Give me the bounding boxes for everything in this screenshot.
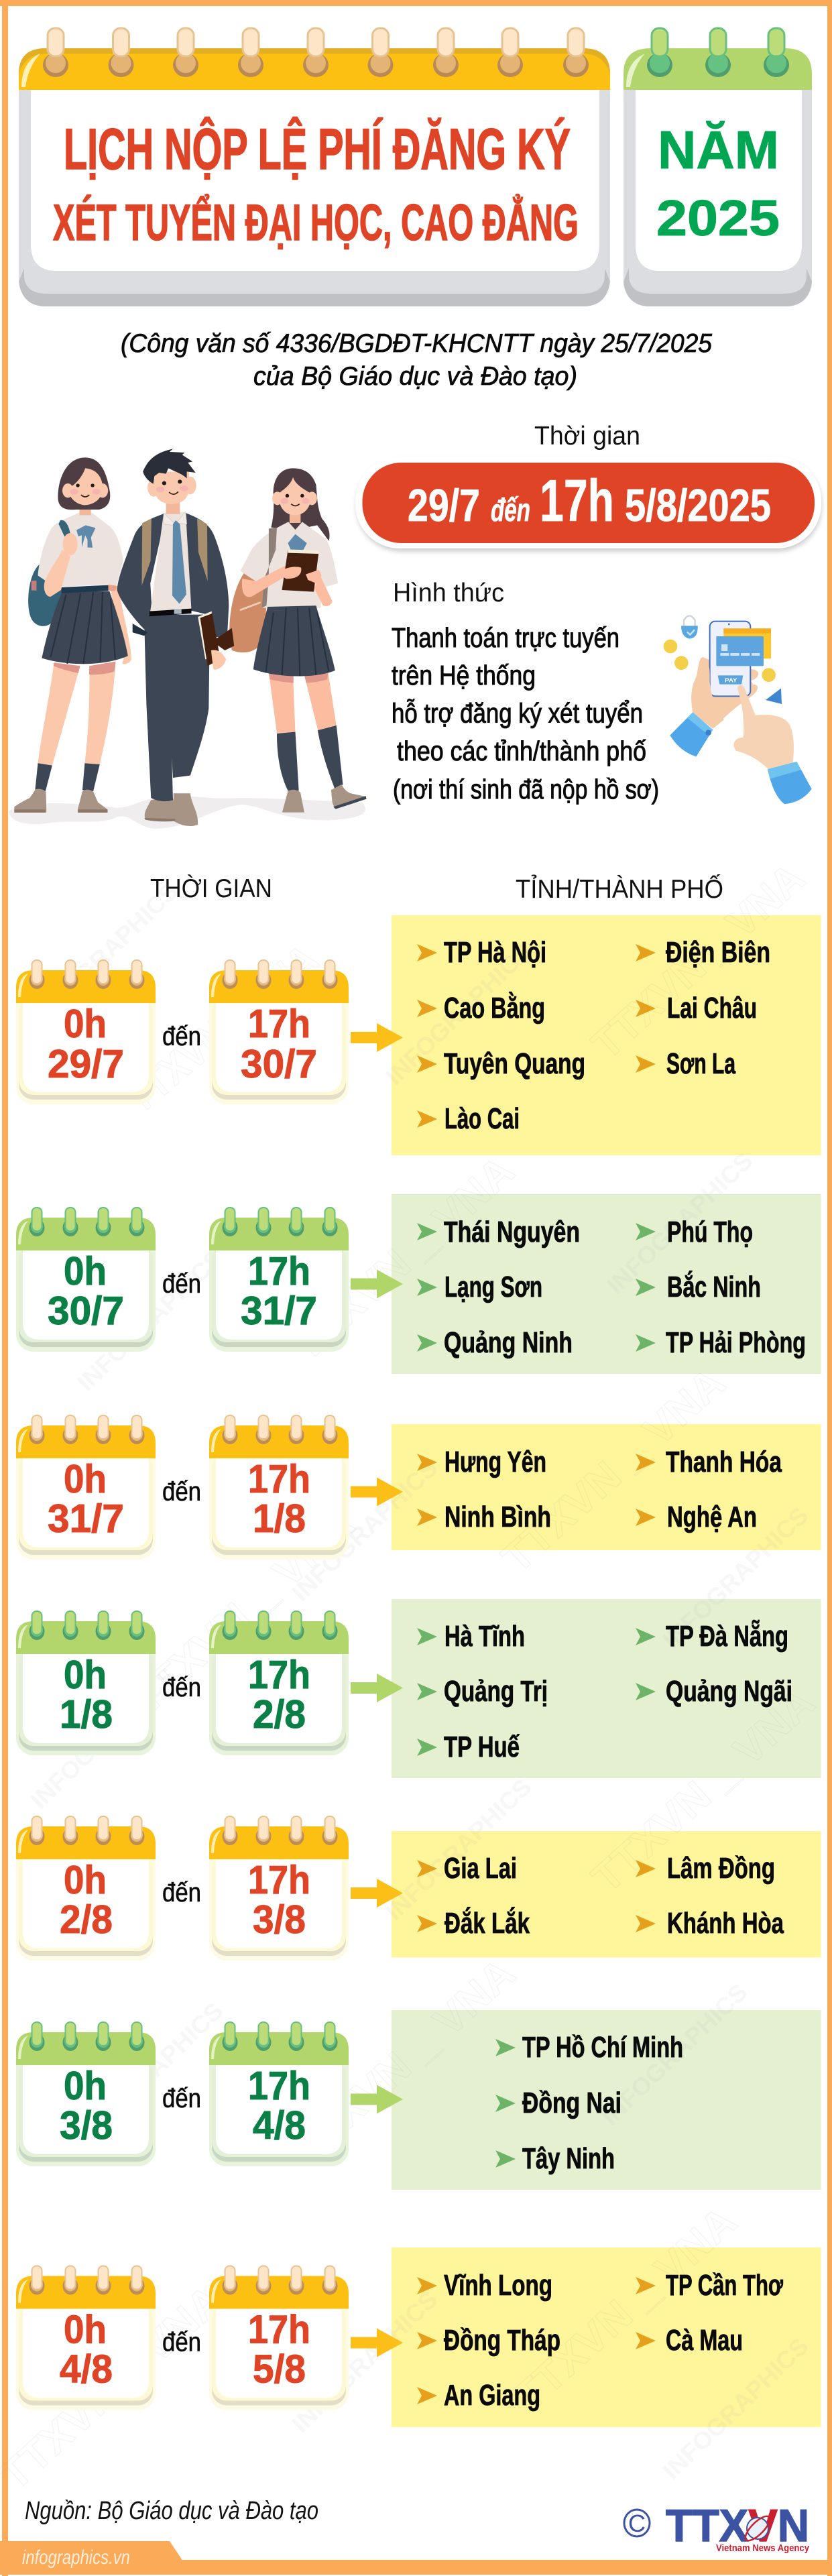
panel: provinces group 2 [392,1194,821,1374]
row 4: provinces: Quảng Trị [444,1675,548,1708]
row 2: end date calendar: 31/7 [241,1289,317,1333]
row 5: end date calendar: 3/8 [253,1897,306,1942]
row 3: provinces: Ninh Bình [444,1501,551,1533]
row 4: end date calendar [209,1611,349,1755]
payment method text: theo các tỉnh/thành phố [397,736,646,766]
row 1: provinces: TP Hà Nội [444,936,546,969]
subtitle: legal reference: của Bộ Giáo dục và Đào tạo) [253,362,577,391]
row 6: arrow [351,2085,403,2113]
row 6: start date calendar: 3/8 [60,2103,113,2148]
panel: provinces group 7 [392,2247,821,2427]
row 6: start date calendar: 0h [64,2064,107,2108]
watermark pattern: INFOGRAPHICS [601,1147,758,1299]
row 7: provinces: TP Cần Thơ [666,2269,784,2302]
title calendar [19,28,610,306]
row 7: provinces: Đồng Tháp [444,2324,560,2357]
watermark pattern: TTXVN _ VNA [283,1147,523,1370]
date range text [408,467,771,534]
icon: year calendar rings [647,28,789,77]
row 2: start date calendar: 0h [64,1249,107,1293]
watermark pattern: INFOGRAPHICS [286,2285,443,2438]
year text: NĂM [658,120,779,180]
watermark pattern: INFOGRAPHICS [72,1997,229,2150]
row 3: provinces: Nghệ An [667,1501,757,1533]
date range pill [355,457,821,551]
row 5: start date calendar [16,1816,156,1960]
year text: 2025 [656,190,780,246]
row 4: arrow [351,1674,403,1702]
watermark pattern: INFOGRAPHICS [596,1978,753,2131]
row 4: start date calendar [16,1611,156,1755]
student: boy [117,449,234,826]
watermark pattern: INFOGRAPHICS [380,1773,537,1926]
row 5: arrow [351,1879,403,1908]
row 4: end date calendar: 17h [248,1653,310,1697]
logo: TTXVN: Vietnam News Agency [716,2542,810,2554]
row 1: provinces: Cao Bằng [444,991,545,1024]
row 7: provinces: Cà Mau [666,2324,743,2357]
payment method text: trên Hệ thống [392,660,536,691]
row 7: provinces: Vĩnh Long [444,2269,552,2302]
row 4: end date calendar: 2/8 [253,1692,306,1737]
watermark pattern [0,854,823,2499]
row 5: end date calendar: 17h [248,1858,310,1902]
row 1: provinces: Lào Cai [444,1102,520,1135]
row 3: end date calendar: 1/8 [253,1497,306,1541]
row 4: provinces: Quảng Ngãi [666,1675,792,1708]
row 1: provinces: Sơn La [666,1047,735,1080]
watermark pattern: INFOGRAPHICS [25,1661,182,1814]
payment method text: hỗ trợ đăng ký xét tuyển [392,697,643,728]
watermark pattern: INFOGRAPHICS [27,877,184,1030]
row 5: provinces: Khánh Hòa [667,1907,784,1940]
panel: provinces group 1 [392,915,821,1155]
row 7: end date calendar [209,2266,349,2410]
date range text: 5/8/2025 [625,480,771,531]
watermark pattern: TTXVN _ VNA [493,1359,733,1582]
row 2: provinces: Phú Thọ [667,1216,753,1248]
row 1: start date calendar: 29/7 [48,1042,124,1086]
watermark pattern: TTXVN _ VNA [583,854,814,1068]
row 3: start date calendar [16,1415,156,1560]
watermark pattern: TTXVN _ VNA [117,936,326,1122]
row 1: end date calendar: 17h [248,1002,310,1046]
row 1: arrow [351,1023,403,1052]
row 4: start date calendar: 1/8 [60,1692,113,1737]
row 3: start date calendar: 0h [64,1457,107,1501]
row 6: provinces: Đồng Nai [522,2087,621,2119]
row 5: provinces [417,1852,784,1940]
row 1: start date calendar [16,960,156,1104]
student: left girl [14,457,131,813]
column heading: provinces: TỈNH/THÀNH PHỐ [516,874,723,904]
row 3: start date calendar: 31/7 [48,1497,124,1541]
row 2: provinces: Bắc Ninh [667,1270,761,1303]
row 6: word between dates: đến [162,2084,201,2113]
row 3: provinces: Thanh Hóa [666,1446,782,1478]
row 6: provinces: Tây Ninh [522,2142,615,2175]
row 1: provinces: Tuyên Quang [444,1047,585,1080]
panel: provinces group 3 [392,1424,821,1550]
row 6: start date calendar [16,2022,156,2166]
icon: hands paying on a phone [664,616,812,804]
footer tab: infographics.vn [22,2546,130,2569]
source line: Nguồn: Bộ Giáo dục và Đào tạo [25,2497,318,2525]
row 6: end date calendar: 4/8 [253,2103,306,2148]
payment method text: Thanh toán trực tuyến [392,622,619,653]
panel: provinces group 4 [392,1599,821,1778]
watermark pattern: INFOGRAPHICS [380,937,537,1090]
row 1: provinces [417,936,770,1135]
row 5: start date calendar: 2/8 [60,1897,113,1942]
title text [53,117,579,251]
row 7: word between dates: đến [162,2328,201,2357]
logo: TTXVN: TTXVN [666,2500,809,2551]
row 4: start date calendar: 0h [64,1653,107,1697]
row 6: end date calendar [209,2022,349,2166]
icon: title calendar rings [43,28,589,77]
row 6: provinces [495,2031,683,2175]
row 5: provinces: Gia Lai [444,1852,517,1885]
panel: provinces group 6 [392,2010,821,2190]
row 3: end date calendar: 17h [248,1457,310,1501]
row 6: end date calendar: 17h [248,2064,310,2108]
row 7: end date calendar: 17h [248,2308,310,2352]
watermark pattern: TTXVN _ VNA [284,1950,524,2172]
row 1: end date calendar: 30/7 [241,1042,317,1086]
row 2: provinces: Thái Nguyên [444,1216,580,1248]
watermark pattern: TTXVN _ VNA [583,1679,823,1901]
logo: TTXVN: C [628,2510,646,2537]
subtitle: legal reference: (Công văn số 4336/BGDĐT-KHCNTT ngày 25/7/2025 [121,329,712,358]
row 7: arrow [351,2328,403,2357]
row 5: provinces: Lâm Đồng [667,1852,775,1885]
row 5: provinces: Đắk Lắk [444,1906,530,1940]
row 1: start date calendar: 0h [64,1002,107,1046]
watermark pattern: INFOGRAPHICS [72,1244,229,1397]
row 2: start date calendar [16,1208,156,1352]
label: form: Hình thức [393,579,504,607]
row 3: provinces [417,1446,782,1533]
row 2: start date calendar: 30/7 [48,1289,124,1333]
illustration: three students [9,449,367,829]
footer tab [0,2541,183,2569]
row 1: provinces: Lai Châu [667,992,757,1024]
row 2: end date calendar: 17h [248,1249,310,1293]
watermark pattern: TTXVN _ VNA [123,1501,363,1723]
row 7: start date calendar: 0h [64,2308,107,2352]
label: time: Thời gian [534,422,640,451]
row 2: provinces: Quảng Ninh [444,1326,573,1359]
row 4: provinces [417,1619,792,1763]
year calendar [623,28,812,306]
watermark pattern: INFOGRAPHICS [657,1501,814,1654]
row 6: provinces: TP Hồ Chí Minh [522,2031,683,2064]
row 7: start date calendar [16,2266,156,2410]
row 1: provinces: Điện Biên [666,936,770,969]
row 3: end date calendar [209,1415,349,1560]
row 1: word between dates: đến [162,1022,201,1051]
panel: provinces group 5 [392,1831,821,1958]
watermark pattern: TTXVN _ VNA [505,2198,745,2420]
row 4: provinces: TP Đà Nẵng [666,1619,788,1653]
payment method text [392,622,659,805]
title text: LỊCH NỘP LỆ PHÍ ĐĂNG KÝ [64,117,571,182]
payment method text: (nơi thí sinh đã nộp hồ sơ) [393,774,659,805]
row 3: word between dates: đến [162,1477,201,1507]
row 2: end date calendar [209,1208,349,1352]
row 1: end date calendar [209,960,349,1104]
row 7: end date calendar: 5/8 [253,2347,306,2391]
row 4: provinces: TP Huế [444,1731,520,1763]
ground shadow [9,797,365,829]
year text [656,120,780,246]
row 4: word between dates: đến [162,1673,201,1702]
row 4: provinces: Hà Tĩnh [444,1620,525,1653]
date range text: 17h [540,467,614,534]
column heading: time: THỜI GIAN [150,874,272,903]
date range text: 29/7 [408,480,480,531]
row 7: provinces [417,2269,784,2412]
row 3: provinces: Hưng Yên [444,1446,546,1478]
row 5: start date calendar: 0h [64,1858,107,1902]
watermark pattern: INFOGRAPHICS [286,1454,443,1606]
icon: hands paying on a phone: PAY [725,677,737,683]
row 7: start date calendar: 4/8 [60,2347,113,2391]
row 2: arrow [351,1270,403,1298]
row 5: word between dates: đến [162,1878,201,1908]
row 7: provinces: An Giang [444,2379,540,2412]
subtitle: legal reference [121,329,712,391]
student: right girl [229,468,367,813]
date range text: đến [491,493,530,528]
row 2: provinces [417,1216,806,1359]
watermark pattern: INFOGRAPHICS [657,2332,814,2485]
row 3: arrow [351,1478,403,1506]
row 5: end date calendar [209,1816,349,1960]
row 2: provinces: Lạng Sơn [444,1271,542,1303]
row 2: word between dates: đến [162,1269,201,1299]
